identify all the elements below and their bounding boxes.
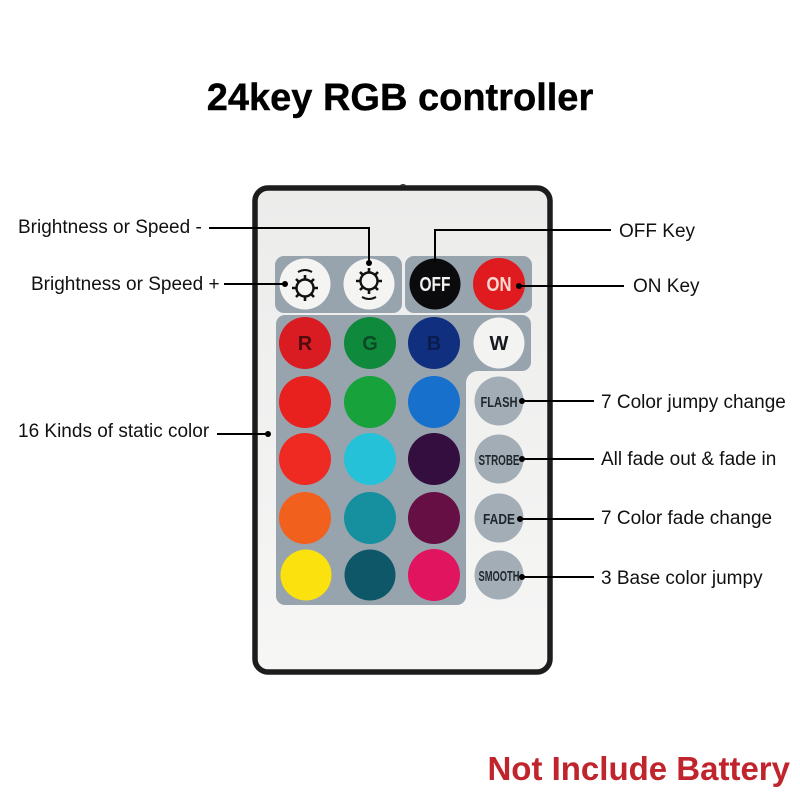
callout: STROBE	[519, 449, 776, 470]
callout: brightness minus	[18, 217, 372, 266]
OFF key: OFF	[420, 274, 450, 296]
callout: ON key: ON Key	[633, 276, 700, 297]
callout: brightness plus: Brightness or Speed +	[31, 274, 220, 295]
mode keys	[474, 376, 524, 600]
FLASH key: FLASH	[480, 394, 518, 411]
G key: G	[362, 333, 378, 355]
G key	[344, 317, 396, 369]
callout: ON key	[516, 276, 700, 297]
FADE key	[474, 494, 524, 542]
R key	[279, 317, 331, 369]
panel: colour keys	[276, 315, 531, 605]
SMOOTH key: SMOOTH	[478, 568, 520, 585]
panel: power keys	[405, 256, 532, 313]
callout: brightness minus: Brightness or Speed -	[18, 217, 202, 238]
callout: FLASH: 7 Color jumpy change	[601, 392, 786, 413]
SMOOTH key	[474, 550, 524, 600]
FADE key: FADE	[483, 511, 515, 528]
STROBE key	[474, 434, 524, 484]
callout: OFF key: OFF Key	[619, 221, 696, 242]
static colour keys	[279, 376, 460, 601]
panel: brightness keys	[275, 256, 402, 313]
callout: FADE	[517, 508, 772, 529]
W key: W	[490, 333, 509, 355]
remote control body	[255, 184, 550, 672]
B key: B	[427, 333, 441, 355]
callout: SMOOTH: 3 Base color jumpy	[601, 568, 763, 589]
R key: R	[298, 333, 313, 355]
icon: brightness minus key	[344, 258, 394, 310]
title: 24key RGB controller	[207, 77, 593, 119]
callout: FLASH	[519, 392, 786, 413]
ON key: ON	[486, 274, 512, 296]
callout: static colour: 16 Kinds of static color	[18, 421, 210, 442]
W key	[474, 318, 524, 368]
callout: SMOOTH	[519, 568, 763, 589]
STROBE key: STROBE	[478, 452, 520, 469]
callout: STROBE: All fade out & fade in	[601, 449, 776, 470]
battery note: Not Include Battery	[487, 750, 791, 787]
FLASH key	[474, 376, 524, 426]
B key	[408, 317, 460, 369]
callout: OFF key	[435, 221, 696, 262]
icon: brightness plus key	[280, 258, 330, 310]
callout: FADE: 7 Color fade change	[601, 508, 772, 529]
